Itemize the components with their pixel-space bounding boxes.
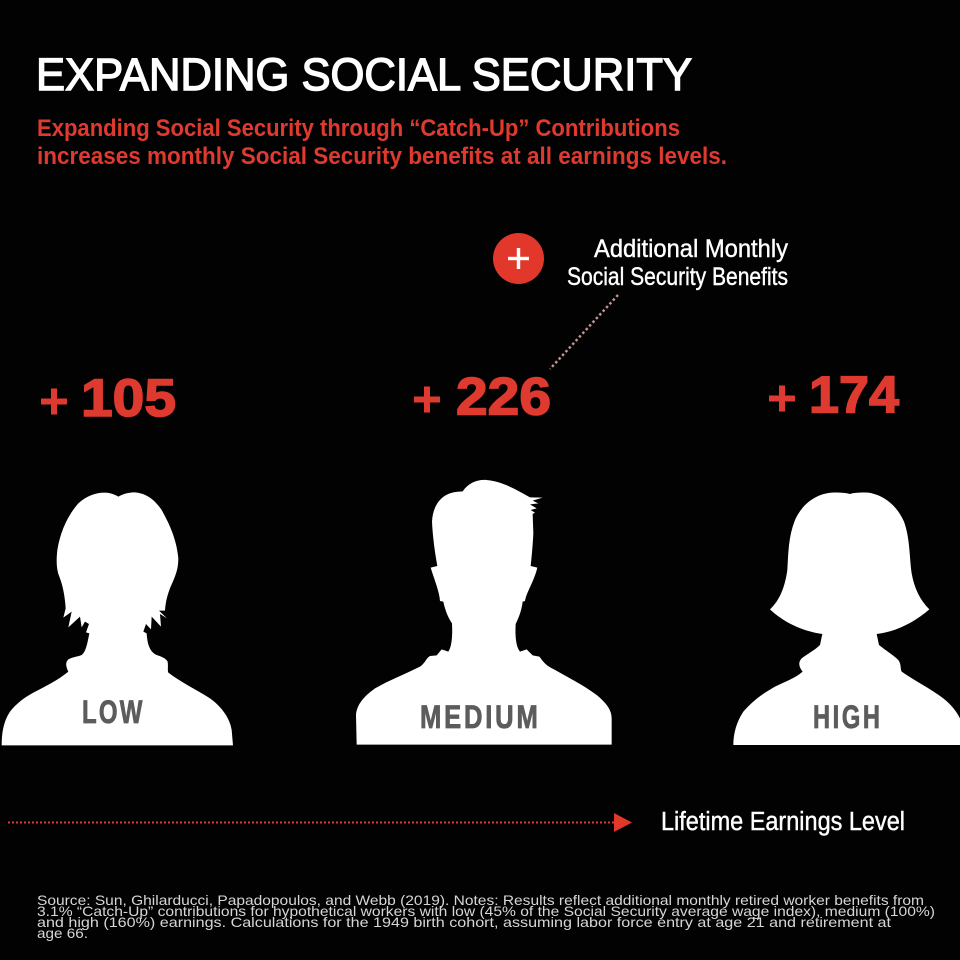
value: plus 174 bbox=[769, 366, 899, 424]
source footnote: age 66. bbox=[37, 925, 88, 941]
value: plus 105 bbox=[41, 369, 176, 428]
title: EXPANDING SOCIAL SECURITY bbox=[36, 49, 692, 100]
axis label: Lifetime Earnings Level bbox=[661, 808, 905, 836]
icon: red plus circle legend bbox=[493, 233, 544, 284]
legend text: additional monthly benefits: Additional Monthly bbox=[594, 235, 788, 263]
source footnote: Source: Sun, Ghilarducci, Papadopoulos, and Webb (2019). Notes: Results reflect additional monthly retired worker benefits from bbox=[37, 892, 924, 908]
value: plus 226: 226 bbox=[456, 368, 551, 426]
subtitle bbox=[37, 115, 727, 170]
source footnote: and high (160%) earnings. Calculations for the 1949 birth cohort, assuming labor force entry at age 21 and retirement at bbox=[37, 914, 891, 930]
subtitle: increases monthly Social Security benefits at all earnings levels. bbox=[37, 143, 727, 170]
value: plus 226 bbox=[414, 368, 551, 426]
arrow: lifetime earnings axis bbox=[8, 813, 632, 832]
label: MEDIUM: MEDIUM bbox=[420, 700, 541, 736]
silhouette: medium earner bbox=[356, 480, 612, 745]
source footnote: 3.1% “Catch-Up” contributions for hypothetical workers with low (45% of the Social Security average wage index), medium (100%) bbox=[37, 903, 935, 919]
label: HIGH: HIGH bbox=[813, 700, 883, 735]
subtitle: Expanding Social Security through “Catch-Up” Contributions bbox=[37, 115, 680, 142]
silhouette: low earner bbox=[2, 492, 233, 745]
value: plus 174: 174 bbox=[809, 366, 899, 424]
value: plus 105: 105 bbox=[81, 369, 176, 428]
silhouette: high earner bbox=[733, 492, 960, 745]
label: LOW: LOW bbox=[82, 694, 145, 730]
source footnote bbox=[37, 892, 935, 941]
dotted leader line bbox=[550, 295, 618, 369]
legend text: additional monthly benefits: Social Security Benefits bbox=[567, 263, 788, 291]
legend text: additional monthly benefits bbox=[567, 235, 788, 291]
